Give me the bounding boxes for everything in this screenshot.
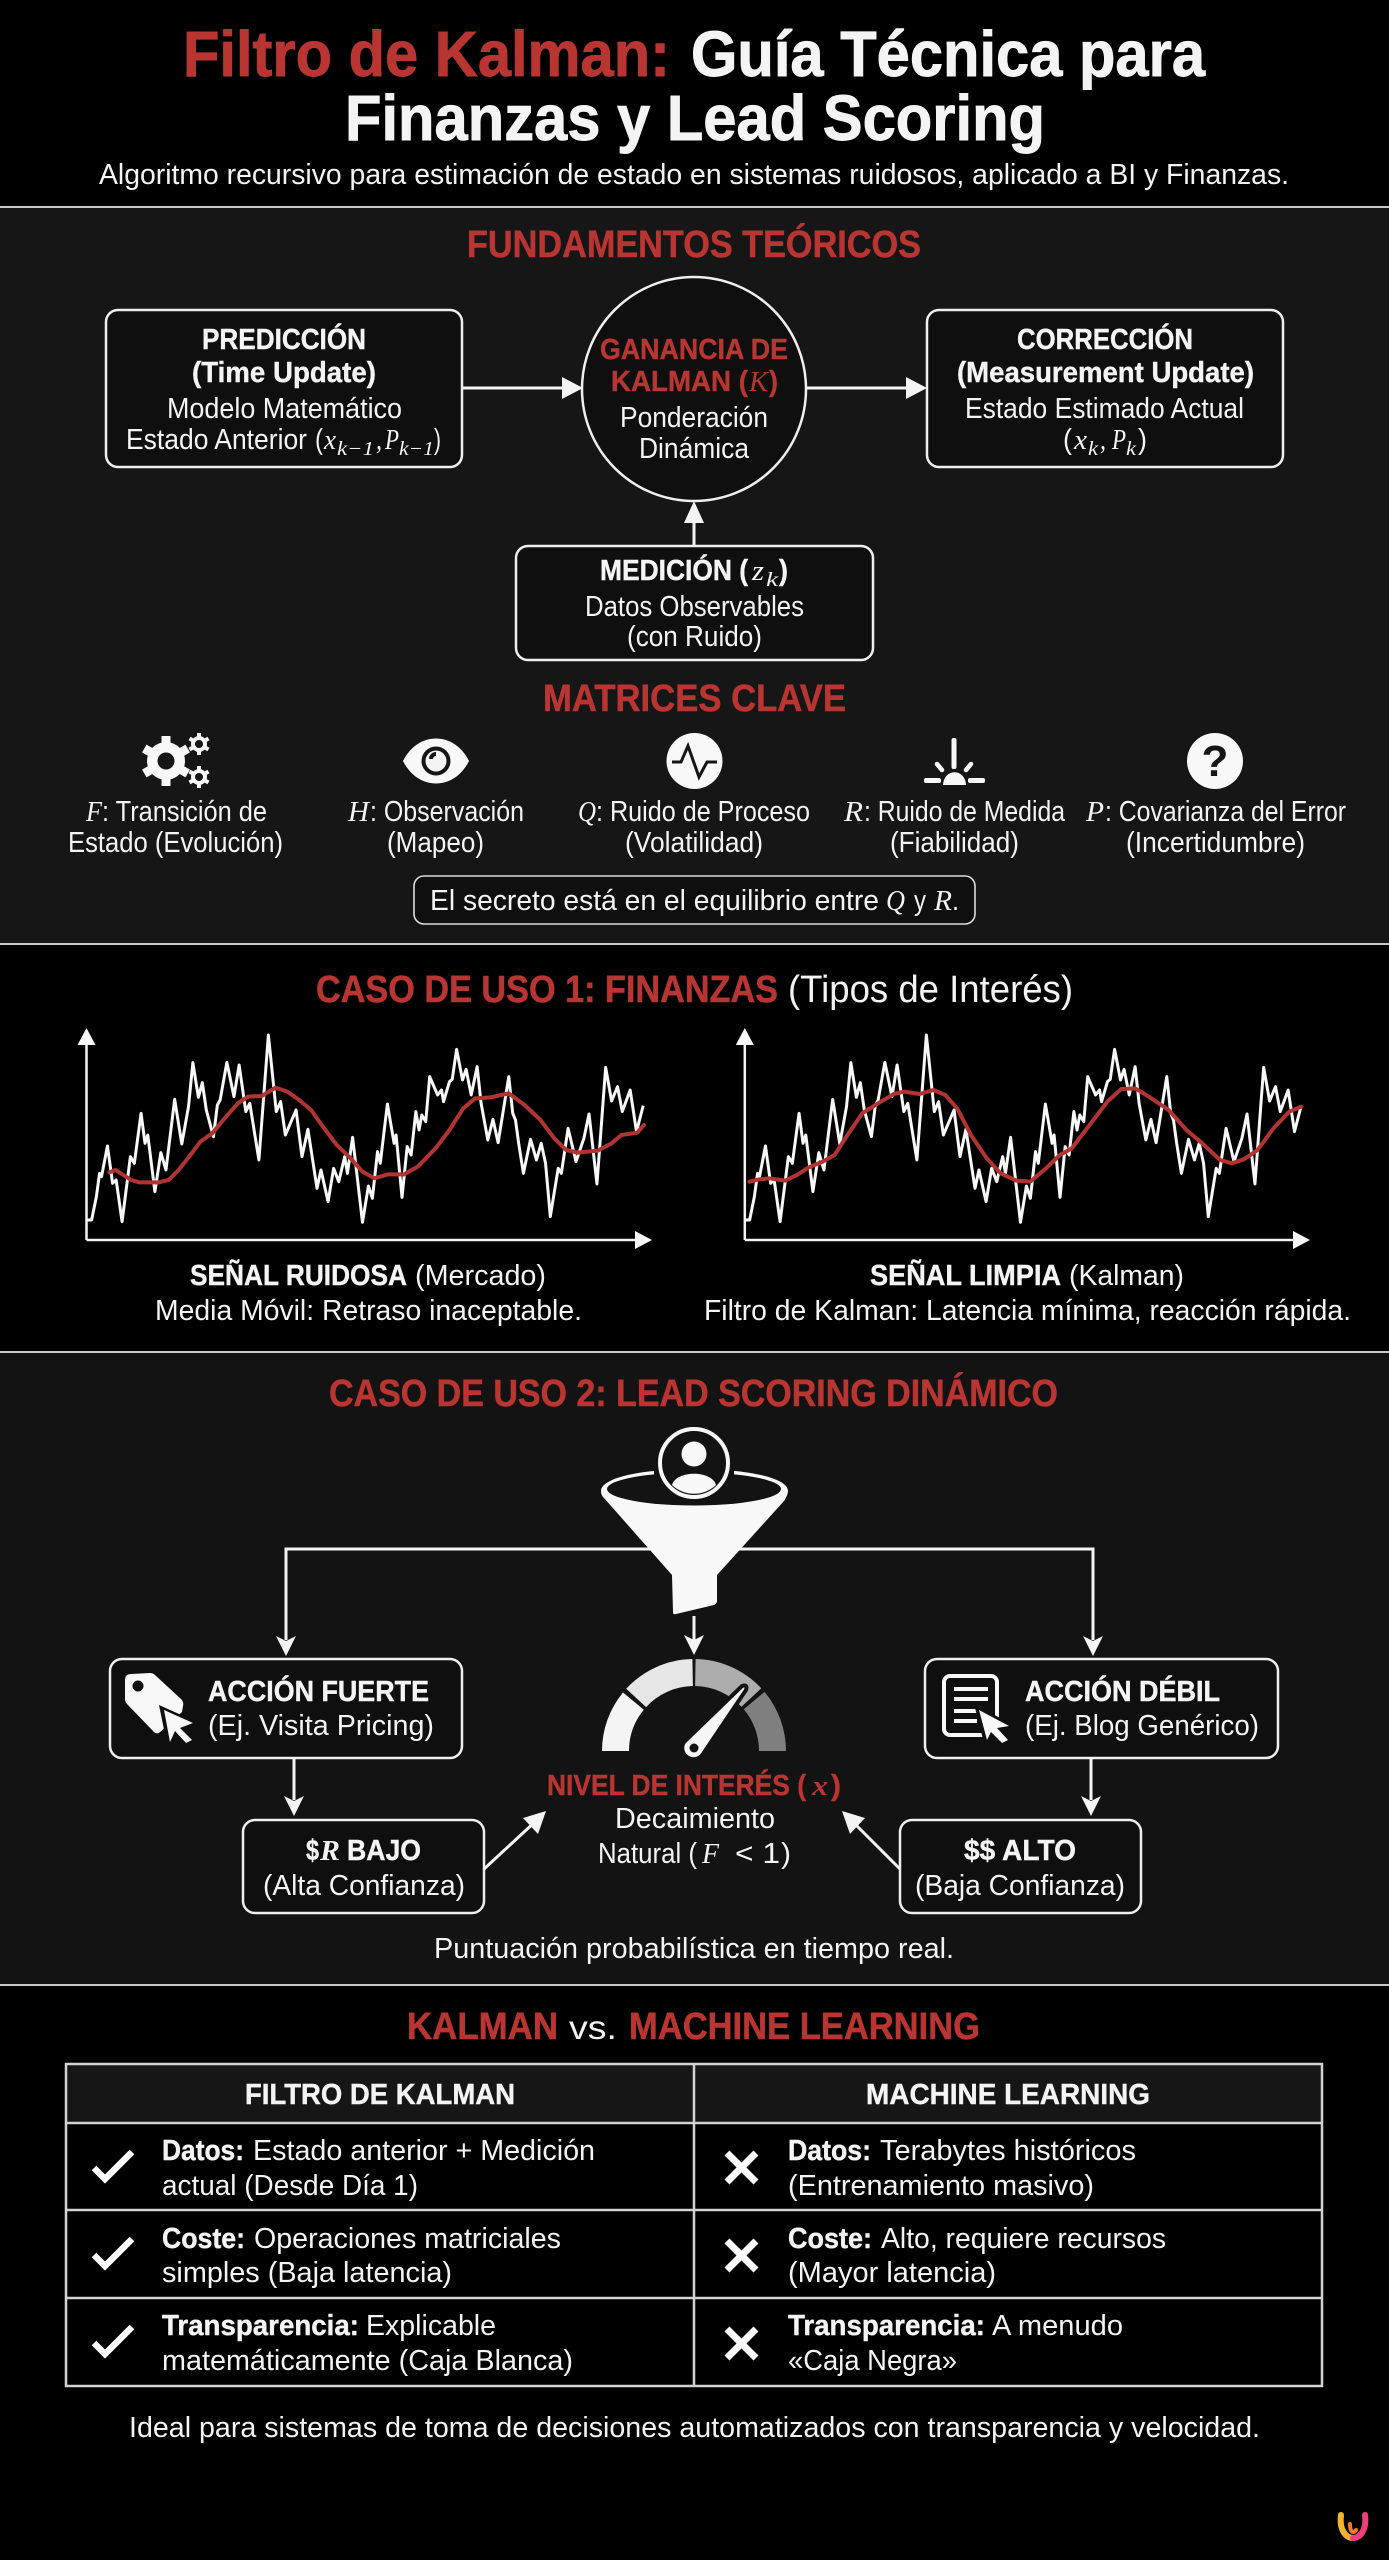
panel: acción débil — [925, 1659, 1278, 1758]
icon: gears — [144, 733, 208, 788]
caption: puntuación: Puntuación probabilística en tiempo real. — [434, 1933, 954, 1965]
panel: corrección: ) — [1138, 424, 1147, 456]
comparison table — [66, 2064, 1322, 2386]
matrix Q label — [578, 796, 810, 859]
matrix H label: (Mapeo) — [387, 827, 484, 859]
text: nivel de interés: ) — [831, 1770, 841, 1802]
matrix F label: : Transición de — [102, 796, 267, 828]
icon: eye — [403, 738, 469, 784]
chart: señal limpia — [736, 1028, 1310, 1249]
panel: predicción: k−1 — [399, 438, 434, 460]
matrix P label: P — [1085, 796, 1104, 828]
callout: equilibrio Q y R — [414, 876, 975, 924]
panel: corrección: , — [1100, 424, 1106, 456]
matrix R label: (Fiabilidad) — [890, 827, 1019, 859]
row 3 right: Transparencia: — [788, 2310, 985, 2342]
icon: gauge — [602, 1659, 786, 1759]
arrow: predicción to ganancia — [462, 377, 583, 399]
panel: corrección: Estado Estimado Actual — [965, 393, 1244, 425]
panel: ganancia de kalman: Dinámica — [639, 433, 750, 465]
icon: sun on horizon — [924, 738, 985, 785]
heading: matrices clave: MATRICES CLAVE — [543, 678, 846, 720]
chart caption: señal ruidosa — [155, 1258, 582, 1327]
icon: funnel with person — [601, 1423, 788, 1614]
text: nivel de interés: F — [701, 1838, 719, 1870]
matrix Q label: : Ruido de Proceso — [596, 796, 810, 828]
arrow: medición to ganancia — [684, 501, 704, 546]
icon: question mark — [1187, 733, 1243, 789]
chart caption: señal limpia: SEÑAL LIMPIA — [870, 1258, 1061, 1292]
panel: R bajo: R — [319, 1835, 340, 1867]
row 2 left: Coste: — [162, 2223, 245, 2255]
row 2 left: simples (Baja latencia) — [162, 2257, 452, 2289]
matrix R label — [843, 796, 1066, 859]
icon: logo — [1341, 2515, 1365, 2538]
panel: predicción — [106, 310, 462, 467]
panel: corrección: CORRECCIÓN — [1017, 322, 1193, 356]
panel: R bajo: $ — [306, 1835, 319, 1867]
panel: corrección: (Measurement Update) — [957, 357, 1254, 389]
chart caption: señal ruidosa: SEÑAL RUIDOSA — [190, 1258, 407, 1292]
heading: kalman vs machine learning: MACHINE LEARNING — [629, 2006, 980, 2048]
icon: tag with cursor — [125, 1673, 199, 1749]
panel: acción fuerte — [110, 1659, 462, 1758]
table header: filtro de kalman: FILTRO DE KALMAN — [245, 2079, 515, 2111]
matrix R label: : Ruido de Medida — [864, 796, 1066, 828]
heading: kalman vs machine learning: KALMAN — [407, 2006, 558, 2048]
row 2 right: Coste: — [788, 2223, 872, 2255]
icon: question mark: ? — [1202, 737, 1228, 786]
panel: acción débil: (Ej. Blog Genérico) — [1025, 1710, 1259, 1742]
title: Finanzas y Lead Scoring — [345, 82, 1045, 154]
chart caption: señal ruidosa: (Mercado) — [415, 1260, 546, 1292]
panel: corrección: k — [1126, 438, 1137, 460]
heading: caso de uso 1: (Tipos de Interés) — [788, 969, 1073, 1011]
title: Filtro de Kalman: — [183, 18, 670, 90]
panel: medición — [516, 546, 873, 660]
panel: medición: (con Ruido) — [627, 621, 762, 653]
panel: predicción: , — [376, 424, 382, 456]
row 2 right: (Mayor latencia) — [788, 2257, 996, 2289]
panel: predicción: Estado Anterior — [126, 424, 307, 456]
panel: ganancia de kalman: K — [748, 366, 770, 398]
text: nivel de interés: Natural ( — [598, 1838, 697, 1870]
table header: machine learning: MACHINE LEARNING — [866, 2079, 1150, 2111]
row 1 left — [94, 2135, 595, 2202]
arrow: R bajo to nivel — [484, 1811, 546, 1869]
arrow: funnel to acción débil — [694, 1549, 1103, 1656]
panel: predicción: x — [323, 424, 336, 456]
matrix P label — [1085, 796, 1346, 859]
chart caption: señal limpia: (Kalman) — [1069, 1260, 1184, 1292]
text: nivel de interés: ) — [781, 1838, 791, 1870]
panel: S alto — [900, 1820, 1141, 1913]
callout: equilibrio Q y R: El secreto está en el equilibrio entre — [430, 885, 879, 917]
row 3 left: matemáticamente (Caja Blanca) — [162, 2345, 573, 2377]
heading: caso de uso 1: CASO DE USO 1: FINANZAS — [316, 969, 778, 1011]
matrix H label: : Observación — [370, 796, 524, 828]
matrix Q label: (Volatilidad) — [625, 827, 763, 859]
chart caption: señal limpia: Filtro de Kalman: Latencia mínima, reacción rápida. — [704, 1295, 1351, 1327]
callout: equilibrio Q y R: R — [933, 885, 952, 917]
panel: medición: ) — [779, 555, 788, 587]
panel: medición: MEDICIÓN ( — [600, 553, 748, 587]
chart caption: señal ruidosa: Media Móvil: Retraso inaceptable. — [155, 1295, 582, 1327]
matrix P label: (Incertidumbre) — [1126, 827, 1305, 859]
panel: R bajo: BAJO — [347, 1835, 421, 1867]
arrow: funnel to gauge — [684, 1616, 704, 1655]
matrix H label — [347, 796, 524, 859]
row 3 right: «Caja Negra» — [788, 2345, 957, 2377]
matrix F label — [68, 796, 283, 859]
text: nivel de interés: NIVEL DE INTERÉS ( — [547, 1768, 806, 1802]
matrix F label: Estado (Evolución) — [68, 827, 283, 859]
matrix H label: H — [347, 796, 371, 828]
heading: kalman vs machine learning — [407, 2006, 980, 2048]
panel: predicción: Modelo Matemático — [167, 393, 402, 425]
callout: equilibrio Q y R: Q — [886, 885, 905, 917]
panel: R bajo: (Alta Confianza) — [263, 1870, 465, 1902]
arrow: acción fuerte to R bajo — [284, 1758, 304, 1816]
row 1 right: (Entrenamiento masivo) — [788, 2170, 1094, 2202]
icon: document with cursor — [944, 1676, 1015, 1748]
panel: medición: k — [766, 569, 779, 591]
panel: corrección: k — [1088, 438, 1099, 460]
panel: acción débil: ACCIÓN DÉBIL — [1025, 1674, 1220, 1708]
row 2 right — [727, 2223, 1166, 2289]
arrow: acción débil to S alto — [1081, 1758, 1101, 1816]
panel: ganancia de kalman: Ponderación — [620, 402, 768, 434]
row 1 right: Terabytes históricos — [880, 2135, 1136, 2167]
chart: señal ruidosa — [78, 1028, 652, 1249]
panel: predicción: k−1 — [337, 438, 374, 460]
panel: acción fuerte: (Ej. Visita Pricing) — [208, 1710, 434, 1742]
title: Guía Técnica para — [691, 18, 1205, 90]
panel: R bajo — [243, 1820, 484, 1913]
row 3 right: A menudo — [992, 2310, 1123, 2342]
panel: ganancia de kalman: GANANCIA DE — [600, 334, 788, 366]
heading: kalman vs machine learning: vs. — [569, 2009, 617, 2046]
panel: ganancia de kalman — [582, 277, 806, 501]
icon: pulse — [666, 733, 722, 789]
panel: corrección: ( — [1063, 424, 1072, 456]
matrix F label: F — [85, 796, 102, 828]
matrix P label: : Covarianza del Error — [1105, 796, 1346, 828]
row 3 left — [94, 2310, 573, 2377]
panel: ganancia de kalman: KALMAN ( — [611, 366, 748, 398]
text: nivel de interés — [547, 1768, 841, 1870]
panel: corrección: x — [1073, 424, 1087, 456]
panel: predicción: ) — [434, 424, 441, 456]
row 2 left: Operaciones matriciales — [254, 2223, 561, 2255]
row 3 left: Transparencia: — [162, 2310, 359, 2342]
row 1 left: Estado anterior + Medición — [253, 2135, 595, 2167]
panel: medición: Datos Observables — [585, 591, 804, 623]
chart caption: señal limpia — [704, 1258, 1351, 1327]
callout: equilibrio Q y R: y — [914, 885, 926, 917]
panel: ganancia de kalman: ) — [769, 366, 778, 398]
text: nivel de interés: Decaimiento — [615, 1803, 775, 1835]
panel: corrección — [927, 310, 1283, 467]
panel: S alto: (Baja Confianza) — [915, 1870, 1125, 1902]
row 1 right — [727, 2135, 1136, 2202]
panel: predicción: P — [384, 424, 399, 456]
callout: equilibrio Q y R: . — [952, 885, 959, 917]
panel: medición: z — [751, 555, 764, 587]
row 3 left: Explicable — [366, 2310, 496, 2342]
row 1 right: Datos: — [788, 2135, 871, 2167]
panel: predicción: PREDICCIÓN — [202, 322, 366, 356]
panel: corrección: P — [1111, 424, 1126, 456]
heading: fundamentos teóricos: FUNDAMENTOS TEÓRICOS — [467, 222, 921, 266]
matrix R label: R — [843, 796, 863, 828]
title — [183, 18, 1205, 154]
row 1 left: Datos: — [162, 2135, 244, 2167]
panel: S alto: $$ ALTO — [964, 1835, 1076, 1867]
subtitle: Algoritmo recursivo para estimación de estado en sistemas ruidosos, aplicado a BI y Finanzas. — [99, 159, 1289, 191]
row 2 left — [94, 2223, 561, 2289]
panel: predicción: (Time Update) — [192, 357, 376, 389]
text: nivel de interés: < 1 — [735, 1838, 780, 1870]
arrow: ganancia to corrección — [806, 377, 927, 399]
text: nivel de interés: x — [811, 1770, 828, 1802]
row 2 right: Alto, requiere recursos — [881, 2223, 1166, 2255]
heading: caso de uso 1 — [316, 969, 1073, 1011]
arrow: funnel to acción fuerte — [276, 1549, 694, 1656]
arrow: S alto to nivel — [842, 1811, 900, 1869]
panel: acción fuerte: ACCIÓN FUERTE — [208, 1674, 429, 1708]
heading: caso de uso 2: CASO DE USO 2: LEAD SCORING DINÁMICO — [329, 1371, 1058, 1415]
row 3 right — [727, 2310, 1123, 2377]
panel: predicción: ( — [315, 424, 323, 456]
matrix Q label: Q — [578, 796, 596, 828]
footer text: Ideal para sistemas de toma de decisiones automatizados con transparencia y velocidad. — [129, 2412, 1260, 2444]
row 1 left: actual (Desde Día 1) — [162, 2170, 418, 2202]
